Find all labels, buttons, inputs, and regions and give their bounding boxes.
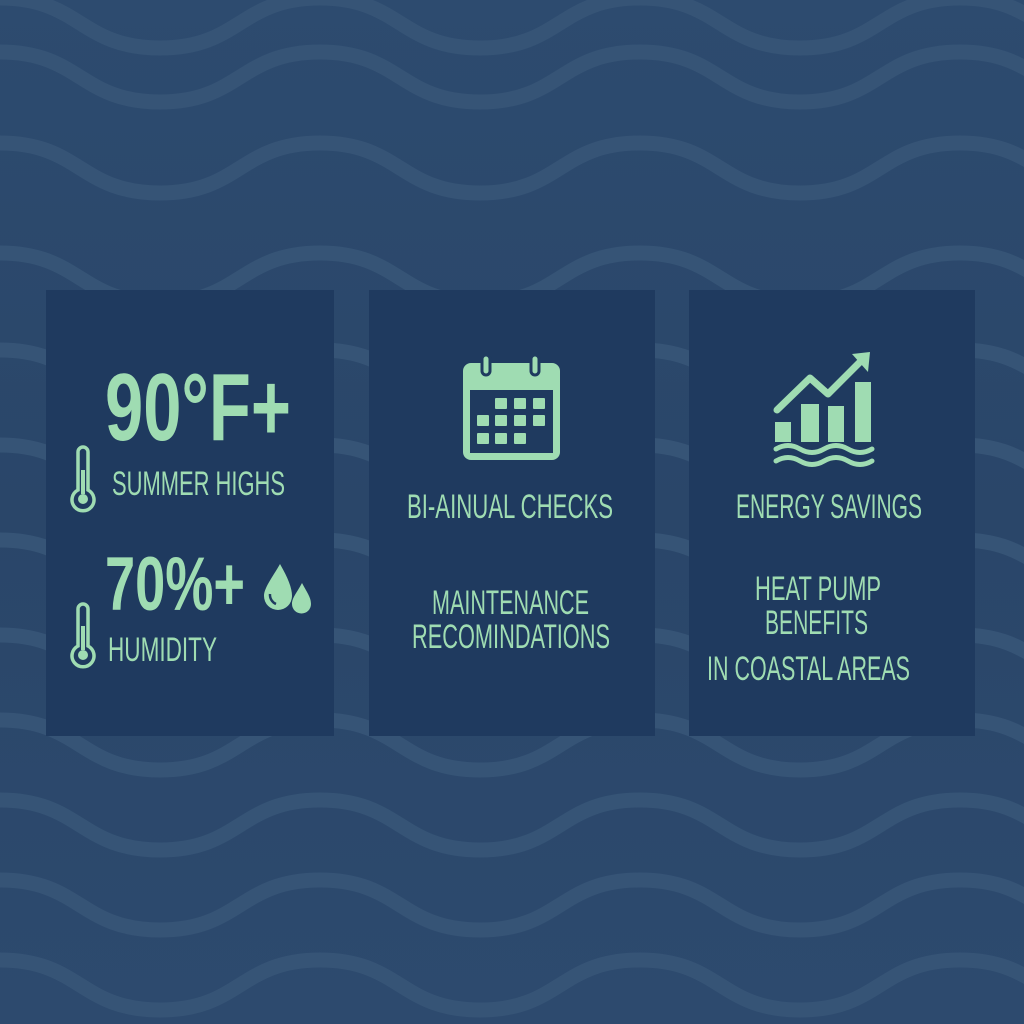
stat: 70%+: 70%+: [105, 542, 245, 627]
text: heat pump benefits: HEAT PUMP: [755, 570, 881, 608]
icon: water drops: [264, 564, 311, 614]
text: heat pump benefits: BENEFITS: [765, 604, 868, 642]
text: maintenance recommendations: MAINTENANCE: [432, 584, 589, 622]
stat: 90F+: 90°F+: [105, 354, 291, 461]
icon: calendar: [463, 355, 560, 460]
panel: climate: [46, 290, 334, 736]
label: summer highs: SUMMER HIGHS: [112, 465, 285, 503]
icon: thermometer: [72, 447, 94, 511]
label: humidity: HUMIDITY: [108, 631, 217, 669]
text: heat pump benefits: [707, 570, 910, 688]
text: heat pump benefits: IN COASTAL AREAS: [707, 650, 910, 688]
heading: bi-annual checks: BI-AINUAL CHECKS: [407, 488, 613, 526]
text: maintenance recommendations: RECOMINDATIONS: [412, 618, 610, 656]
panel: energy: [689, 290, 975, 736]
icon: thermometer 2: [72, 604, 94, 667]
icon: chart with waves: [775, 352, 872, 464]
text: maintenance recommendations: [412, 584, 610, 656]
panel: maintenance: [369, 290, 655, 736]
